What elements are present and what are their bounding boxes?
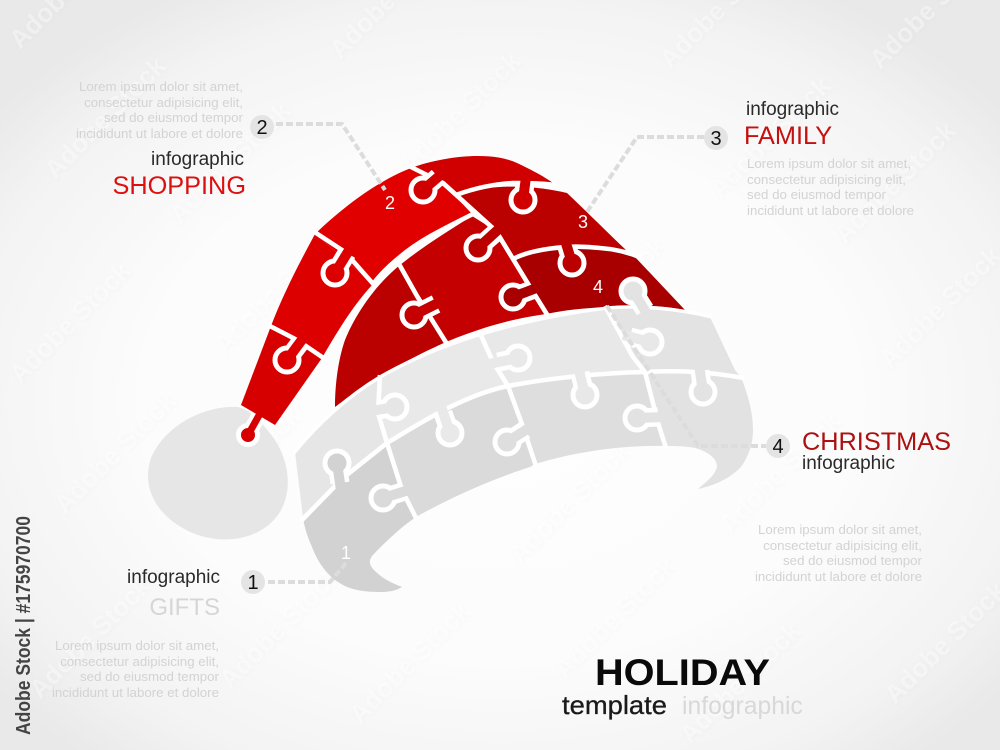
watermark pattern: Adobe Stock	[393, 45, 527, 179]
gray piece: upper middle	[378, 334, 508, 443]
red piece: crown	[411, 156, 553, 194]
block: shopping: sed do eiusmod tempor	[104, 110, 244, 125]
block: gifts: Lorem ipsum dolor sit amet,	[55, 638, 219, 653]
block: gifts: sed do eiusmod tempor	[80, 669, 220, 684]
block: shopping: SHOPPING	[112, 172, 246, 200]
badge 2: 2	[256, 117, 268, 139]
leader line 1	[268, 562, 347, 582]
watermark pattern: Adobe Stock	[3, 255, 137, 389]
block: gifts: consectetur adipisicing elit,	[60, 654, 219, 669]
red piece: middle	[271, 234, 373, 358]
gray piece: upper third	[480, 309, 645, 386]
block: shopping	[76, 79, 246, 200]
block: family: infographic	[746, 99, 839, 120]
watermark pattern: Adobe Stock	[703, 70, 837, 204]
watermark pattern: Adobe Stock	[713, 405, 847, 539]
stock id vertical text: Adobe Stock | #175970700	[13, 516, 35, 735]
gray piece: tail	[303, 443, 416, 592]
red piece: number 3	[458, 187, 626, 258]
gray piece: upper right	[607, 308, 741, 377]
puzzle seams	[268, 166, 744, 521]
watermark pattern: Adobe Stock	[548, 550, 682, 684]
block: gifts	[52, 567, 220, 700]
red piece: band left	[335, 265, 446, 407]
piece number 1: 1	[341, 543, 351, 563]
badge 3: 3	[710, 128, 722, 150]
red piece: number 4	[514, 247, 685, 314]
badge 4	[766, 434, 790, 458]
hat pompom	[148, 407, 288, 539]
block: shopping: consectetur adipisicing elit,	[84, 95, 243, 110]
red piece: upper	[315, 168, 472, 284]
watermark pattern: Adobe Stock	[673, 615, 807, 749]
block: shopping: incididunt ut labore et dolore	[76, 126, 243, 141]
gray piece: lower left	[387, 386, 535, 517]
watermark pattern: Adobe Stock	[503, 435, 637, 569]
leader line 2	[276, 124, 385, 190]
puzzle knobs	[238, 172, 715, 510]
block: christmas: sed do eiusmod tempor	[783, 553, 923, 568]
block: family: Lorem ipsum dolor sit amet,	[747, 156, 911, 171]
watermark pattern: Adobe Stock	[208, 225, 342, 359]
block: christmas: infographic	[802, 453, 895, 474]
gray piece: lower right	[645, 371, 753, 489]
piece number 4: 4	[593, 277, 603, 297]
block: family: incididunt ut labore et dolore	[747, 203, 914, 218]
watermark pattern: Adobe Stock	[538, 230, 672, 364]
block: family: consectetur adipisicing elit,	[747, 172, 906, 187]
badge 3	[704, 126, 728, 150]
block: christmas: CHRISTMAS	[802, 428, 951, 456]
block: shopping: infographic	[151, 149, 244, 170]
watermark pattern: Adobe Stock	[828, 115, 962, 249]
block: christmas	[755, 428, 951, 584]
title	[562, 651, 803, 720]
icon: santa hat puzzle	[148, 156, 753, 592]
title: infographic	[682, 693, 803, 720]
piece number 2: 2	[385, 193, 395, 213]
watermark pattern: Adobe Stock	[48, 385, 182, 519]
block: shopping: Lorem ipsum dolor sit amet,	[79, 79, 243, 94]
piece number 3: 3	[578, 212, 588, 232]
watermark pattern: Adobe Stock	[23, 570, 157, 704]
watermark pattern: Adobe Stock	[213, 560, 347, 694]
watermark pattern: Adobe Stock	[163, 95, 297, 229]
badge 2	[250, 115, 274, 139]
leader line 4	[607, 306, 766, 446]
leader line 3	[587, 137, 704, 212]
gray piece: lower middle	[508, 372, 665, 464]
badge 1	[241, 570, 265, 594]
block: christmas: consectetur adipisicing elit,	[763, 538, 922, 553]
title: HOLIDAY	[595, 651, 770, 693]
block: family	[744, 99, 914, 218]
title: template	[562, 690, 667, 720]
block: gifts: incididunt ut labore et dolore	[52, 685, 219, 700]
watermark pattern: Adobe Stock	[173, 400, 307, 534]
watermark pattern: Adobe Stock	[38, 50, 172, 184]
red piece: band right	[400, 216, 546, 342]
block: gifts: infographic	[127, 567, 220, 588]
block: gifts: GIFTS	[149, 594, 220, 621]
badge 4: 4	[772, 436, 784, 458]
block: family: sed do eiusmod tempor	[747, 187, 887, 202]
watermark pattern: Adobe Stock	[343, 595, 477, 729]
block: christmas: incididunt ut labore et dolore	[755, 569, 922, 584]
block: family: FAMILY	[744, 122, 832, 150]
badge 1: 1	[247, 572, 259, 594]
gray piece: upper left	[295, 377, 387, 518]
block: christmas: Lorem ipsum dolor sit amet,	[758, 522, 922, 537]
red piece: tip	[241, 326, 322, 425]
